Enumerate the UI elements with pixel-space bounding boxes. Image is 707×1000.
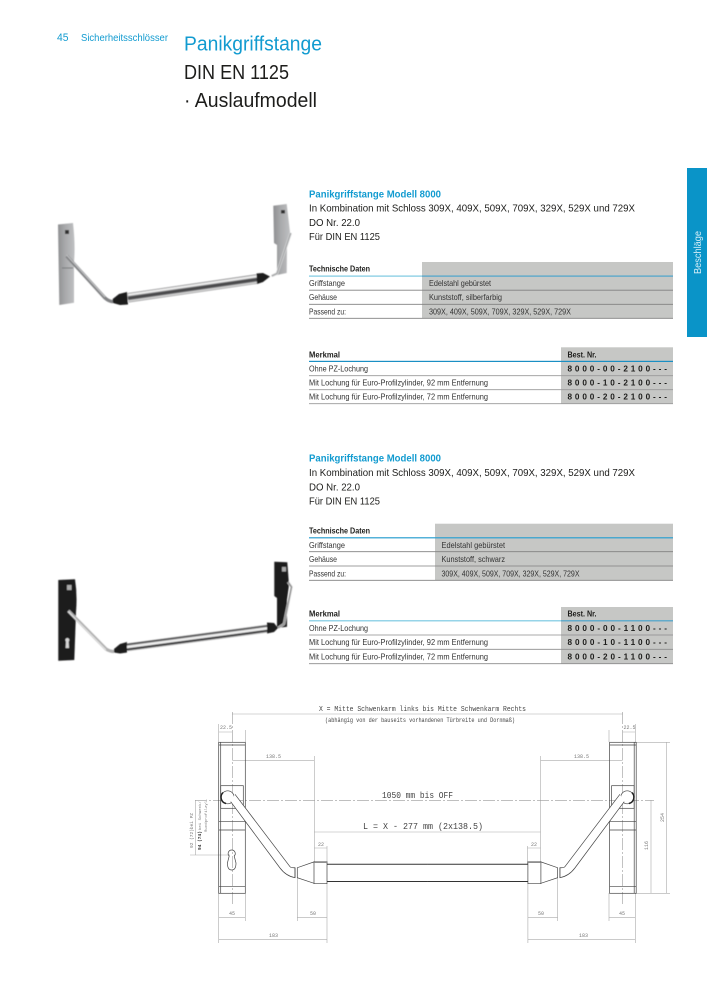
table: Merkmal / Best. Nr. 1: Best. Nr.: [568, 350, 596, 359]
technical drawing: [189, 706, 670, 943]
dimension: 1050 mm: 1050 mm bis OFF: [382, 791, 453, 801]
swing arms: [67, 256, 113, 302]
right plate: [273, 204, 290, 275]
table: Merkmal / Best. Nr. 2: 8000-10-1100---: [568, 638, 667, 647]
table: Merkmal / Best. Nr. 2: Mit Lochung für Euro-Profilzylinder, 72 mm Entfernung: [309, 652, 488, 662]
small dimensions: 22: [531, 842, 537, 848]
small dimensions: 45: [229, 911, 235, 917]
centre lines: [195, 712, 654, 905]
side tab: Beschläge: [687, 168, 707, 337]
table: Merkmal / Best. Nr. 1: Merkmal: [309, 350, 340, 359]
title: DIN EN 1125: [184, 61, 289, 84]
table: Technische Daten 2: Passend zu:: [309, 570, 346, 578]
small dimensions: 50: [310, 911, 316, 917]
page header: [57, 32, 168, 44]
table: Merkmal / Best. Nr. 2: Best. Nr.: [568, 610, 596, 619]
right plate: [274, 562, 289, 628]
small dimensions: Rundprofilzyl.: [204, 798, 209, 832]
table: Technische Daten 2: Griffstange: [309, 541, 345, 550]
small dimensions: 50: [538, 911, 544, 917]
small dimensions: bei Schwenk/: [198, 801, 203, 830]
swing arms: [68, 611, 114, 652]
product block 1 text: Panikgriffstange Modell 8000: [309, 188, 441, 200]
dimension: X: X = Mitte Schwenkarm links bis Mitte Schwenkarm Rechts: [319, 706, 526, 714]
table: Technische Daten 1: Kunststoff, silberfarbig: [429, 293, 502, 302]
product block 2 text: DO Nr. 22.0: [309, 482, 360, 494]
small dimensions: [189, 725, 666, 939]
small dimensions: 254: [660, 813, 666, 822]
table: Merkmal / Best. Nr. 2: [309, 607, 673, 664]
bar: [128, 279, 257, 298]
table: Merkmal / Best. Nr. 1: Mit Lochung für Euro-Profilzylinder, 72 mm Entfernung: [309, 393, 488, 402]
table: Technische Daten 2: Technische Daten: [309, 527, 370, 536]
product block 2 text: In Kombination mit Schloss 309X, 409X, 509X, 709X, 329X, 529X und 729X: [309, 467, 635, 479]
table: Merkmal / Best. Nr. 2: Mit Lochung für Euro-Profilzylinder, 92 mm Entfernung: [309, 638, 488, 647]
table: Technische Daten 1: 309X, 409X, 509X, 709X, 329X, 529X, 729X: [429, 308, 571, 316]
product block 1 text: Für DIN EN 1125: [309, 231, 380, 243]
title: [184, 33, 322, 112]
table: Merkmal / Best. Nr. 2: Merkmal: [309, 610, 340, 619]
table: Technische Daten 1: Technische Daten: [309, 265, 370, 274]
table: Technische Daten 2: 309X, 409X, 509X, 709X, 329X, 529X, 729X: [442, 570, 580, 578]
product block 2 text: [309, 453, 635, 508]
page number: 45: [57, 32, 68, 44]
left plate: [58, 223, 75, 305]
product block 1 text: [309, 188, 635, 243]
photo: black panic bar: [58, 562, 291, 661]
bar: [127, 628, 268, 647]
table: Technische Daten 2: [309, 524, 673, 580]
small dimensions: 116: [644, 841, 650, 850]
table: Merkmal / Best. Nr. 1: [309, 347, 673, 404]
photo: silver panic bar: [58, 204, 291, 305]
table: Merkmal / Best. Nr. 2: 8000-20-1100---: [568, 652, 667, 662]
small dimensions: 22.5: [220, 725, 232, 731]
table: Technische Daten 1: Gehäuse: [309, 293, 337, 302]
small dimensions: 94 (74): [197, 831, 203, 850]
title: Panikgriffstange: [184, 33, 322, 56]
table: Merkmal / Best. Nr. 2: Ohne PZ-Lochung: [309, 624, 368, 633]
product block 1 text: In Kombination mit Schloss 309X, 409X, 509X, 709X, 329X, 529X und 729X: [309, 203, 635, 215]
small dimensions: 138.5: [266, 754, 281, 760]
dimension lines: [190, 714, 670, 943]
small dimensions: 183: [579, 933, 588, 939]
end caps: [113, 292, 128, 305]
end caps: [114, 642, 127, 654]
dimension note: (abhängig von der bauseits vorhandenen Türbreite und Dornmaß): [325, 717, 515, 724]
table: Technische Daten 2: Gehäuse: [309, 555, 337, 564]
section name: Sicherheitsschlösser: [81, 32, 168, 44]
small dimensions: 45: [619, 911, 625, 917]
product block 2 text: Panikgriffstange Modell 8000: [309, 453, 441, 465]
left plate: [58, 579, 77, 661]
table: Merkmal / Best. Nr. 1: 8000-20-2100---: [568, 393, 667, 402]
small dimensions: 183: [269, 933, 278, 939]
small dimensions: 138.5: [574, 754, 589, 760]
bar geometry, left and mirrored right: [219, 742, 427, 893]
table: Merkmal / Best. Nr. 2: 8000-00-1100---: [568, 624, 667, 633]
table: Merkmal / Best. Nr. 1: 8000-00-2100---: [568, 364, 667, 374]
dimension: L: L = X - 277 mm (2x138.5): [363, 822, 483, 832]
keyhole: [65, 638, 69, 648]
table: Merkmal / Best. Nr. 1: 8000-10-2100---: [568, 378, 667, 388]
product block 1 text: DO Nr. 22.0: [309, 217, 360, 229]
title: · Auslaufmodell: [184, 89, 317, 112]
table: Technische Daten 1: Griffstange: [309, 279, 345, 288]
table: Technische Daten 1: Passend zu:: [309, 308, 346, 316]
product block 2 text: Für DIN EN 1125: [309, 496, 380, 508]
table: Technische Daten 2: Edelstahl gebürstet: [442, 541, 506, 550]
small dimensions: 22.5: [624, 725, 636, 731]
small dimensions: 92 (72)bei PZ: [189, 813, 195, 848]
table: Technische Daten 1: [309, 262, 673, 318]
table: Technische Daten 2: Kunststoff, schwarz: [442, 555, 505, 564]
small dimensions: 22: [318, 842, 324, 848]
table: Technische Daten 1: Edelstahl gebürstet: [429, 279, 492, 288]
table: Merkmal / Best. Nr. 1: Ohne PZ-Lochung: [309, 364, 368, 374]
keyhole: [227, 850, 236, 870]
table: Merkmal / Best. Nr. 1: Mit Lochung für Euro-Profilzylinder, 92 mm Entfernung: [309, 378, 488, 388]
side tab: Beschläge: Beschläge: [692, 231, 704, 274]
